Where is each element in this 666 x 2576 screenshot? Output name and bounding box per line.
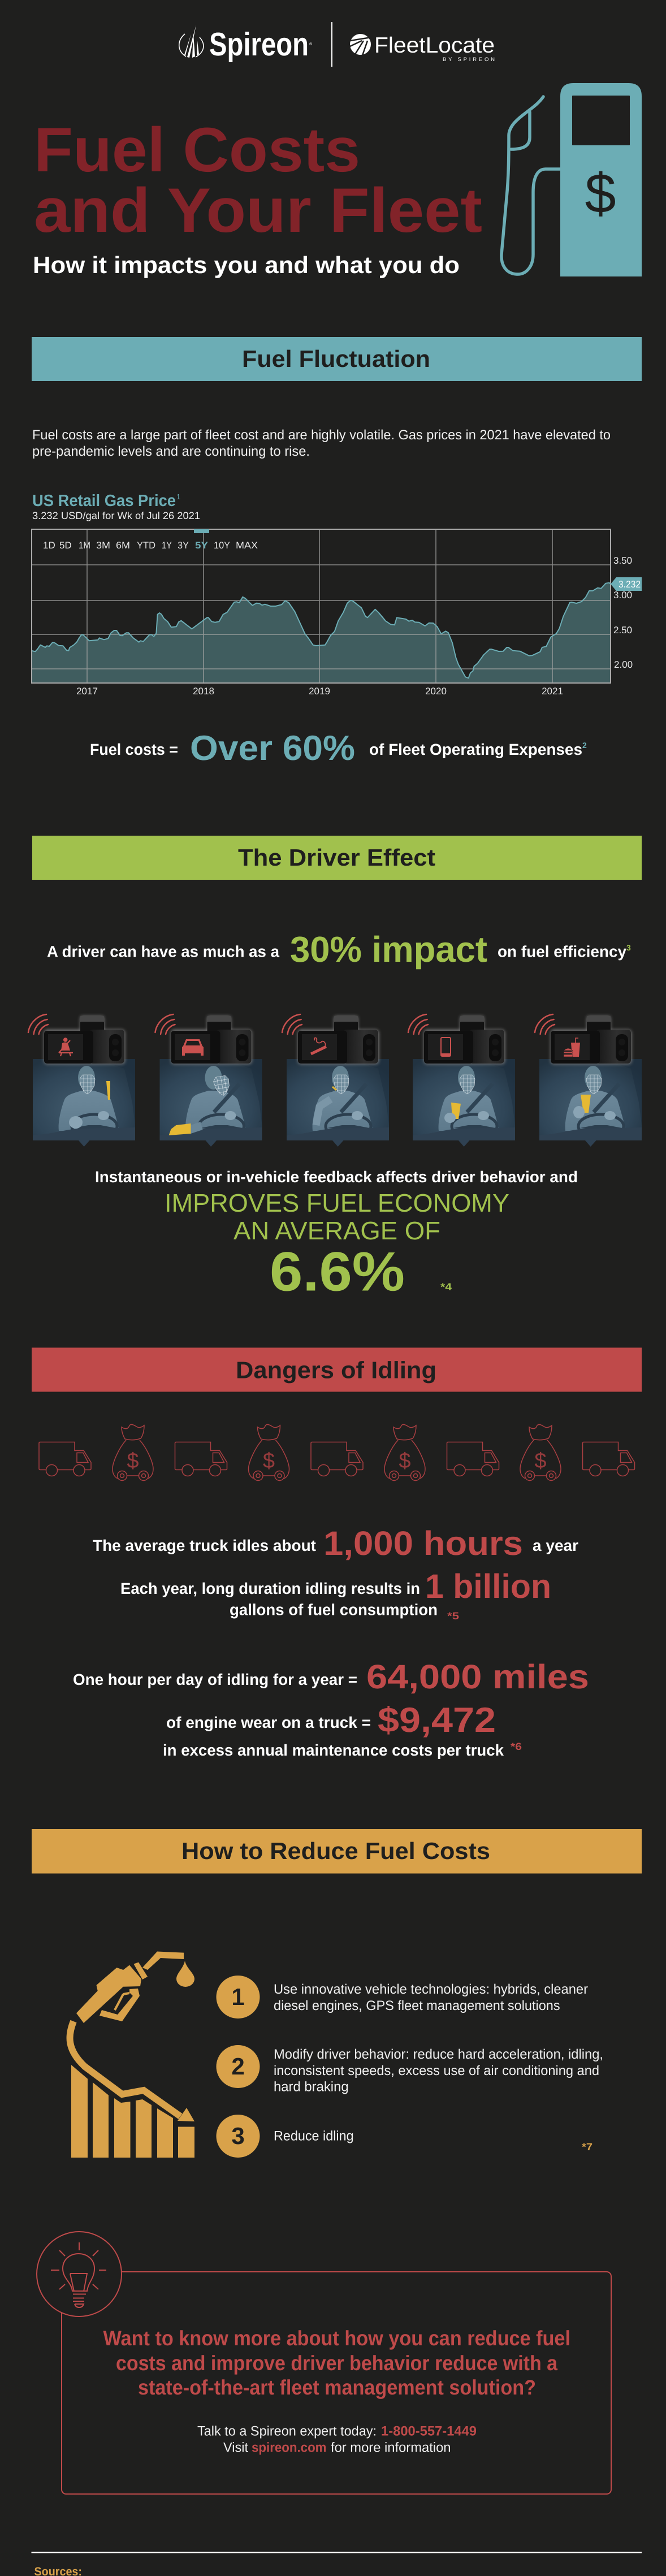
step 3: 3	[231, 2123, 245, 2149]
stat: 30% impact: on fuel efficiency	[498, 943, 626, 960]
chart heading: 1	[176, 492, 180, 501]
stat: 30% impact: A driver can have as much as a	[47, 943, 279, 960]
stat: 64,000 miles: One hour per day of idling for a year =	[73, 1671, 357, 1688]
y axis labels: 3.00	[613, 590, 632, 600]
stat: 64,000 miles: 64,000 miles	[366, 1658, 589, 1696]
stat: in-vehicle feedback improves fuel economy: IMPROVES FUEL ECONOMY	[165, 1188, 509, 1217]
stat: $9,472	[163, 1701, 522, 1759]
range selector: 6M	[116, 540, 130, 551]
banner: The Driver Effect: The Driver Effect	[238, 844, 435, 871]
stat: 1 billion: gallons of fuel consumption	[230, 1601, 438, 1618]
icon: car	[182, 1039, 204, 1056]
illustration: smoking alert driver	[282, 1014, 389, 1147]
callout box	[37, 2232, 611, 2494]
logo: Spireon: Spireon	[209, 26, 309, 63]
contact details: Visit	[223, 2440, 248, 2455]
stat: 64,000 miles	[73, 1658, 589, 1696]
step 3	[216, 2115, 354, 2158]
step 3: Reduce idling	[274, 2129, 354, 2144]
icon: phone	[441, 1038, 451, 1056]
step 1: Use innovative vehicle technologies: hybrids, cleaner	[274, 1982, 588, 1997]
banner: How to Reduce Fuel Costs	[32, 1829, 642, 1874]
stat: 1 billion: *5	[447, 1610, 459, 1622]
stat: 1,000 hours	[93, 1524, 578, 1562]
illustration: phone use alert driver	[408, 1014, 515, 1147]
contact details: for more information	[331, 2440, 451, 2455]
x axis labels: 2021	[542, 686, 563, 697]
stat: 1 billion: Each year, long duration idling results in	[120, 1580, 420, 1597]
title: and Your Fleet	[34, 175, 482, 245]
stat: in-vehicle feedback improves fuel economy: *4	[440, 1281, 452, 1293]
icon: light bulb	[37, 2232, 122, 2316]
title	[34, 115, 482, 245]
step 2: Modify driver behavior: reduce hard acceleration, idling,	[274, 2047, 603, 2062]
callout heading: Want to know more about how you can reduce fuel	[103, 2327, 570, 2350]
stat: in-vehicle feedback improves fuel economy: AN AVERAGE OF	[233, 1216, 440, 1245]
icon: fuel pump	[501, 83, 642, 276]
illustration: forward collision alert driver	[155, 1014, 262, 1147]
range selector	[43, 529, 258, 551]
chart area fill	[32, 583, 611, 683]
x axis labels: 2018	[193, 686, 214, 697]
icon row: trucks and money bags: $	[127, 1449, 139, 1473]
icon row: trucks and money bags: $	[263, 1449, 275, 1473]
step 1: 1	[231, 1983, 245, 2010]
icon row: trucks and money bags: $	[534, 1449, 547, 1473]
footnote 7: *7	[582, 2141, 593, 2153]
x axis labels	[76, 686, 563, 697]
stat: $9,472: *6	[511, 1741, 522, 1752]
y axis labels: 2.00	[614, 659, 633, 670]
x axis labels: 2017	[76, 686, 98, 697]
banner: Dangers of Idling: Dangers of Idling	[236, 1357, 436, 1383]
callout heading: costs and improve driver behavior reduce with a	[116, 2352, 557, 2375]
callout heading: state-of-the-art fleet management solution?	[138, 2376, 536, 2399]
logo: Spireon: ®	[309, 42, 313, 46]
step 1	[216, 1976, 588, 2019]
logo: FleetLocate by Spireon	[350, 33, 495, 63]
icon: fuel pump: $	[585, 162, 616, 224]
logo: Spireon	[179, 25, 313, 63]
text block: fuel cost intro: Fuel costs are a large part of fleet cost and are highly volatile. Gas prices in 2021 have elevated to	[32, 427, 611, 443]
chart heading: US Retail Gas Price	[32, 492, 176, 510]
current price tag	[611, 577, 642, 591]
banner: Dangers of Idling	[32, 1348, 642, 1392]
chart heading: 3.232 USD/gal for Wk of Jul 26 2021	[32, 510, 200, 521]
subtitle: How it impacts you and what you do	[33, 252, 460, 278]
text block: fuel cost intro: pre-pandemic levels and are continuing to rise.	[32, 444, 310, 459]
x axis labels: 2020	[425, 686, 447, 697]
contact details: Talk to a Spireon expert today:	[197, 2424, 377, 2439]
range selector: 3Y	[178, 540, 189, 551]
current price tag: 3.232	[619, 579, 641, 590]
banner: Fuel Fluctuation	[32, 337, 642, 381]
y axis labels: 2.50	[613, 625, 632, 636]
stat: 30% impact: 3	[626, 943, 631, 952]
stat: 1,000 hours: 1,000 hours	[323, 1524, 523, 1562]
y axis labels	[613, 555, 633, 670]
stat: 1,000 hours: a year	[533, 1537, 578, 1554]
text block: fuel cost intro	[32, 427, 611, 459]
range selector: 5Y	[195, 540, 209, 551]
range selector: 1M	[79, 540, 90, 551]
step 2	[216, 2045, 603, 2094]
stat: 1 billion: 1 billion	[425, 1567, 551, 1605]
contact details: spireon.com	[252, 2440, 327, 2455]
contact details: 1-800-557-1449	[381, 2424, 477, 2439]
stat: in-vehicle feedback improves fuel economy	[95, 1168, 578, 1303]
banner: How to Reduce Fuel Costs: How to Reduce Fuel Costs	[181, 1838, 490, 1864]
range selector: YTD	[137, 540, 155, 551]
range selector: 5D	[59, 540, 72, 551]
chart heading	[32, 492, 200, 521]
stat: over 60%: 2	[582, 741, 587, 750]
step 2: inconsistent speeds, excess use of air conditioning and	[274, 2063, 599, 2078]
icon: fuel nozzle and falling bars	[70, 1952, 194, 2158]
range selector: 3M	[96, 540, 110, 551]
stat: in-vehicle feedback improves fuel economy: 6.6%	[270, 1241, 405, 1303]
stat: over 60%: Over 60%	[190, 729, 355, 768]
step 2: hard braking	[274, 2080, 349, 2094]
divider between logos	[331, 22, 332, 67]
stat: $9,472: of engine wear on a truck =	[166, 1714, 371, 1731]
logo: FleetLocate by Spireon: FleetLocate	[374, 33, 495, 58]
illustration: seatbelt alert driver	[28, 1014, 135, 1147]
icon: cigarette	[311, 1038, 326, 1054]
stat: $9,472: in excess annual maintenance costs per truck	[163, 1741, 504, 1759]
banner: Fuel Fluctuation: Fuel Fluctuation	[242, 345, 430, 372]
y axis labels: 3.50	[613, 555, 632, 566]
contact details	[197, 2424, 477, 2455]
stat: over 60%: of Fleet Operating Expenses	[369, 741, 582, 758]
range selector: 1Y	[162, 540, 172, 551]
icon: seatbelt	[59, 1038, 73, 1056]
icon row: trucks and money bags	[39, 1424, 634, 1480]
stat: 1,000 hours: The average truck idles about	[93, 1537, 316, 1554]
stat: in-vehicle feedback improves fuel economy: Instantaneous or in-vehicle feedback affects driver behavior and	[95, 1168, 578, 1186]
stat: 30% impact: 30% impact	[290, 929, 487, 970]
logo: FleetLocate by Spireon: BY SPIREON	[443, 57, 495, 63]
icon row: trucks and money bags: $	[399, 1449, 411, 1473]
step 1: diesel engines, GPS fleet management solutions	[274, 1998, 560, 2013]
chart line	[32, 583, 611, 678]
title: Fuel Costs	[34, 115, 360, 185]
range selector: 1D	[43, 540, 55, 551]
stat: $9,472: $9,472	[378, 1701, 496, 1740]
x axis labels: 2019	[309, 686, 330, 697]
step 2: 2	[231, 2053, 245, 2080]
range selector: 10Y	[214, 540, 230, 551]
range selector: MAX	[236, 540, 258, 551]
stat: 1 billion	[120, 1567, 551, 1622]
banner: The Driver Effect	[32, 836, 642, 880]
line chart: US retail gas price	[32, 529, 642, 697]
illustration: food and drink alert driver	[535, 1014, 642, 1147]
callout heading	[103, 2327, 570, 2399]
stat: over 60%: Fuel costs =	[90, 741, 178, 758]
stat: 30% impact	[47, 929, 631, 970]
stat: over 60%	[90, 729, 587, 768]
icon: burger and cup	[564, 1038, 580, 1057]
